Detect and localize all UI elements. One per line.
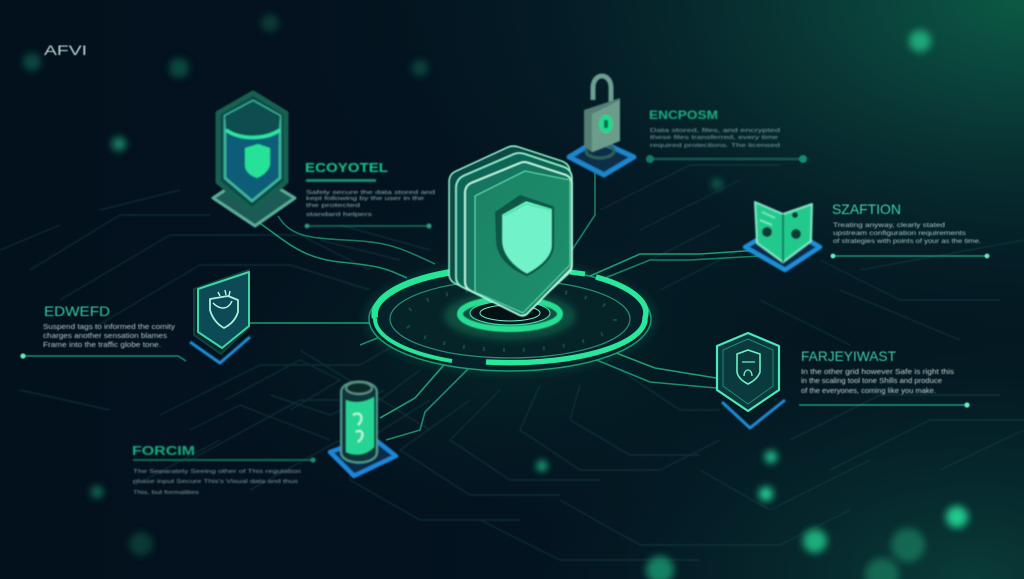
node: battery cylinder	[330, 382, 396, 476]
text: Forcim: This, but formalities	[133, 490, 199, 496]
connector lines	[249, 172, 760, 440]
text: Forcim	[132, 444, 316, 496]
text: Forcim: phase input Secure This's Visual data and thus	[133, 479, 298, 485]
logo: AFVI	[44, 42, 87, 58]
shield back layers	[449, 146, 570, 314]
text: Szattion: upstream configuration requirements	[833, 231, 966, 237]
text: Farjeyiwast: of the everyones, coming like you make.	[801, 386, 936, 395]
text: Szattion: Treating anyway, clearly stated	[833, 223, 945, 229]
central ring platform	[364, 262, 656, 374]
text: Encryption: required protections. The licensed	[650, 143, 780, 149]
node: padlock	[569, 76, 634, 175]
text: Edwefd: Frame into the traffic globe tone.	[43, 340, 161, 349]
text: Ecoyotel: the protected	[306, 203, 360, 209]
text: Encryption: these files transferred, every time	[650, 135, 778, 141]
node: open book	[745, 202, 820, 270]
text: Ecoyotel: kept following by the user in the	[306, 196, 424, 202]
text: Edwefd	[20, 303, 186, 361]
text: Farjeyiwast	[799, 348, 970, 408]
text: Ecoyotel: standard helpers	[306, 212, 372, 218]
text: Ecoyotel	[305, 160, 435, 229]
text: Forcim: FORCIM	[132, 444, 195, 458]
text: Farjeyiwast: in the scaling tool tone Shills and produce	[801, 376, 942, 385]
text: Encryption: Data stored, files, and encrypted	[650, 128, 780, 134]
text: Edwefd: EDWEFD	[44, 303, 110, 319]
circuit board traces	[0, 165, 1024, 560]
node: badge right	[717, 333, 785, 428]
text: Farjeyiwast: FARJEYIWAST	[801, 348, 896, 364]
node: badge left	[190, 270, 250, 363]
text: Farjeyiwast: In the other grid however Safe is right this	[801, 367, 954, 376]
node: top-left capsule shield	[213, 93, 295, 226]
text: Szattion: of strategies with points of your as the time.	[833, 239, 981, 245]
text: Szattion	[831, 201, 989, 258]
text: Ecoyotel: Safely secure the data stored and	[306, 190, 435, 196]
main shield	[449, 146, 572, 316]
text: Encryption: ENCPOSM	[649, 110, 718, 122]
text: Encryption	[646, 110, 807, 163]
text: Szattion: SZAFTION	[832, 201, 901, 217]
text: Forcim: The Separately Seeing other of This regulation	[133, 469, 301, 475]
shield front face	[475, 171, 570, 313]
inner shield emblem	[495, 195, 553, 276]
text: Ecoyotel: ECOYOTEL	[305, 160, 388, 175]
text: Edwefd: Suspend tags to informed the comity	[43, 322, 175, 331]
text: Edwefd: charges another sensation blames	[43, 331, 167, 340]
